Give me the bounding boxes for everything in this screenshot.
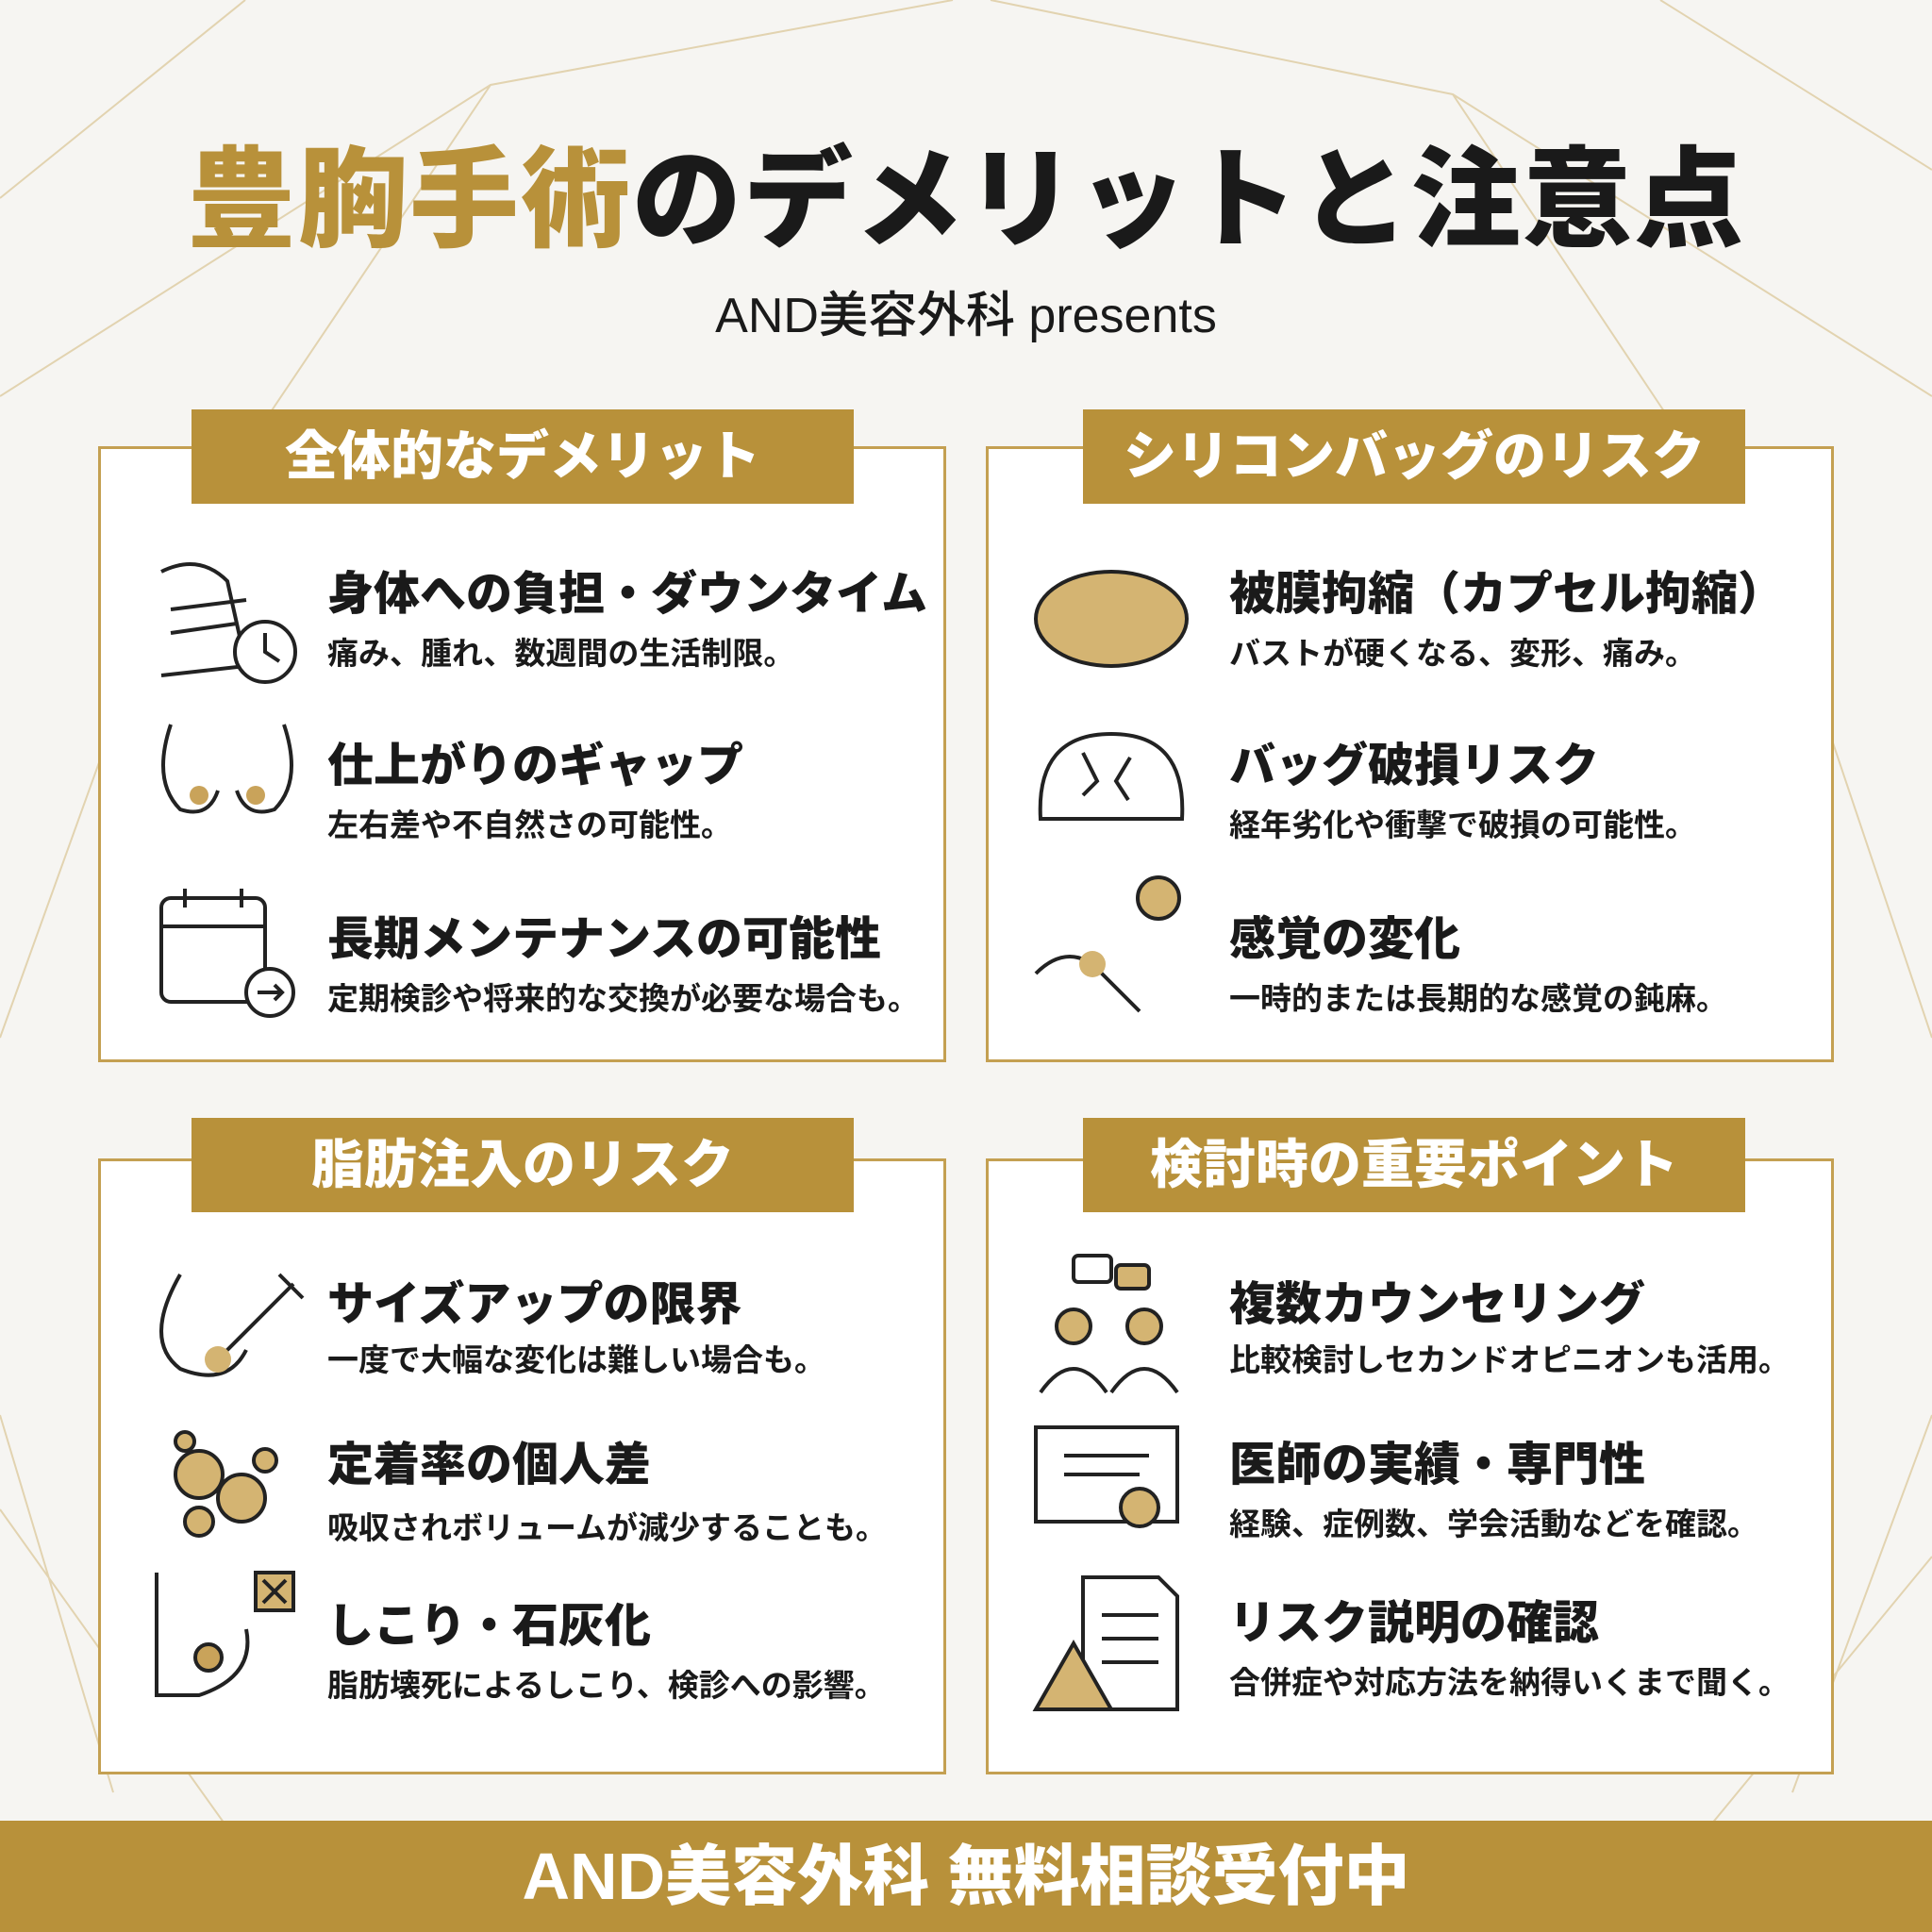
header (192, 1118, 854, 1212)
icon: breasts (161, 724, 293, 813)
icon: breast with lump (155, 1571, 295, 1697)
panel: fat injection risks: 定着率の個人差 (327, 1440, 651, 1491)
icon: calendar (159, 889, 295, 1018)
item: calcification (155, 1571, 886, 1703)
panel: overall demerits: 痛み、腫れ、数週間の生活制限。 (327, 636, 794, 671)
panel: fat injection risks: 一度で大幅な変化は難しい場合も。 (327, 1342, 825, 1377)
panel: silicone risks: バストが硬くなる、変形、痛み。 (1229, 636, 1696, 671)
item: gap (161, 724, 743, 842)
icon: syringe (158, 1274, 304, 1377)
icon: hand with question (1034, 875, 1181, 1013)
header (192, 409, 854, 504)
panel: overall demerits: 身体への負担・ダウンタイム (327, 569, 927, 620)
panel: overall demerits: 左右差や不自然さの可能性。 (327, 808, 732, 842)
header: 全体的なデメリット (285, 426, 760, 486)
footer: AND美容外科 無料相談受付中 (522, 1840, 1410, 1913)
panel: key points: 合併症や対応方法を納得いくまで聞く。 (1229, 1665, 1790, 1700)
icon: broken implant (1038, 732, 1185, 821)
panel: key points: 比較検討しセカンドオピニオンも活用。 (1229, 1342, 1790, 1377)
panel: overall demerits: 定期検診や将来的な交換が必要な場合も。 (327, 981, 919, 1016)
panel: key points (986, 1158, 1834, 1774)
item: doctor expertise (1034, 1425, 1758, 1541)
icon: doctors (1039, 1254, 1179, 1394)
panel: silicone risks: バッグ破損リスク (1229, 741, 1599, 791)
item: maintenance (159, 889, 919, 1018)
header: シリコンバッグのリスク (1124, 426, 1705, 486)
panel: silicone risks: 感覚の変化 (1229, 914, 1460, 965)
item: rupture (1038, 732, 1696, 842)
header (1083, 409, 1745, 504)
panel: silicone risks: 経年劣化や衝撃で破損の可能性。 (1229, 808, 1696, 842)
panel: key points: リスク説明の確認 (1229, 1598, 1599, 1649)
header: 脂肪注入のリスク (311, 1135, 734, 1194)
panel: fat injection risks: 吸収されボリュームが減少することも。 (327, 1510, 887, 1545)
icon: body with clock (160, 562, 297, 684)
item: capsular contracture (1034, 569, 1784, 671)
icon: warning document (1032, 1575, 1179, 1711)
header: 検討時の重要ポイント (1150, 1135, 1678, 1194)
panel: overall demerits: 長期メンテナンスの可能性 (327, 914, 881, 965)
item: size limit (158, 1274, 825, 1377)
item: risk explanation (1032, 1575, 1790, 1711)
item: counseling (1039, 1254, 1790, 1394)
item: downtime (160, 562, 927, 684)
header (1083, 1118, 1745, 1212)
panel: silicone risks: 被膜拘縮（カプセル拘縮） (1229, 569, 1784, 620)
panel: key points: 医師の実績・専門性 (1229, 1440, 1645, 1491)
title: 豊胸手術のデメリットと注意点 (187, 139, 1745, 261)
panel: fat injection risks: 脂肪壊死によるしこり、検診への影響。 (327, 1668, 886, 1703)
panel: fat injection risks: しこり・石灰化 (327, 1601, 651, 1652)
icon: certificate (1034, 1425, 1179, 1528)
icon: implant (1034, 570, 1189, 668)
panel: fat injection risks: サイズアップの限界 (327, 1279, 742, 1330)
footer (0, 1821, 1932, 1932)
panel: fat injection risks (98, 1158, 946, 1774)
panel: silicone risks (986, 446, 1834, 1062)
subtitle: AND美容外科 presents (715, 289, 1217, 343)
panel: overall demerits (98, 446, 946, 1062)
panel: key points: 経験、症例数、学会活動などを確認。 (1229, 1507, 1758, 1541)
panel: overall demerits: 仕上がりのギャップ (327, 741, 743, 791)
panel: key points: 複数カウンセリング (1229, 1279, 1645, 1330)
item: sensation (1034, 875, 1727, 1016)
icon: fat cells (174, 1430, 278, 1538)
item: retention (174, 1430, 887, 1545)
panel: silicone risks: 一時的または長期的な感覚の鈍麻。 (1229, 981, 1727, 1016)
